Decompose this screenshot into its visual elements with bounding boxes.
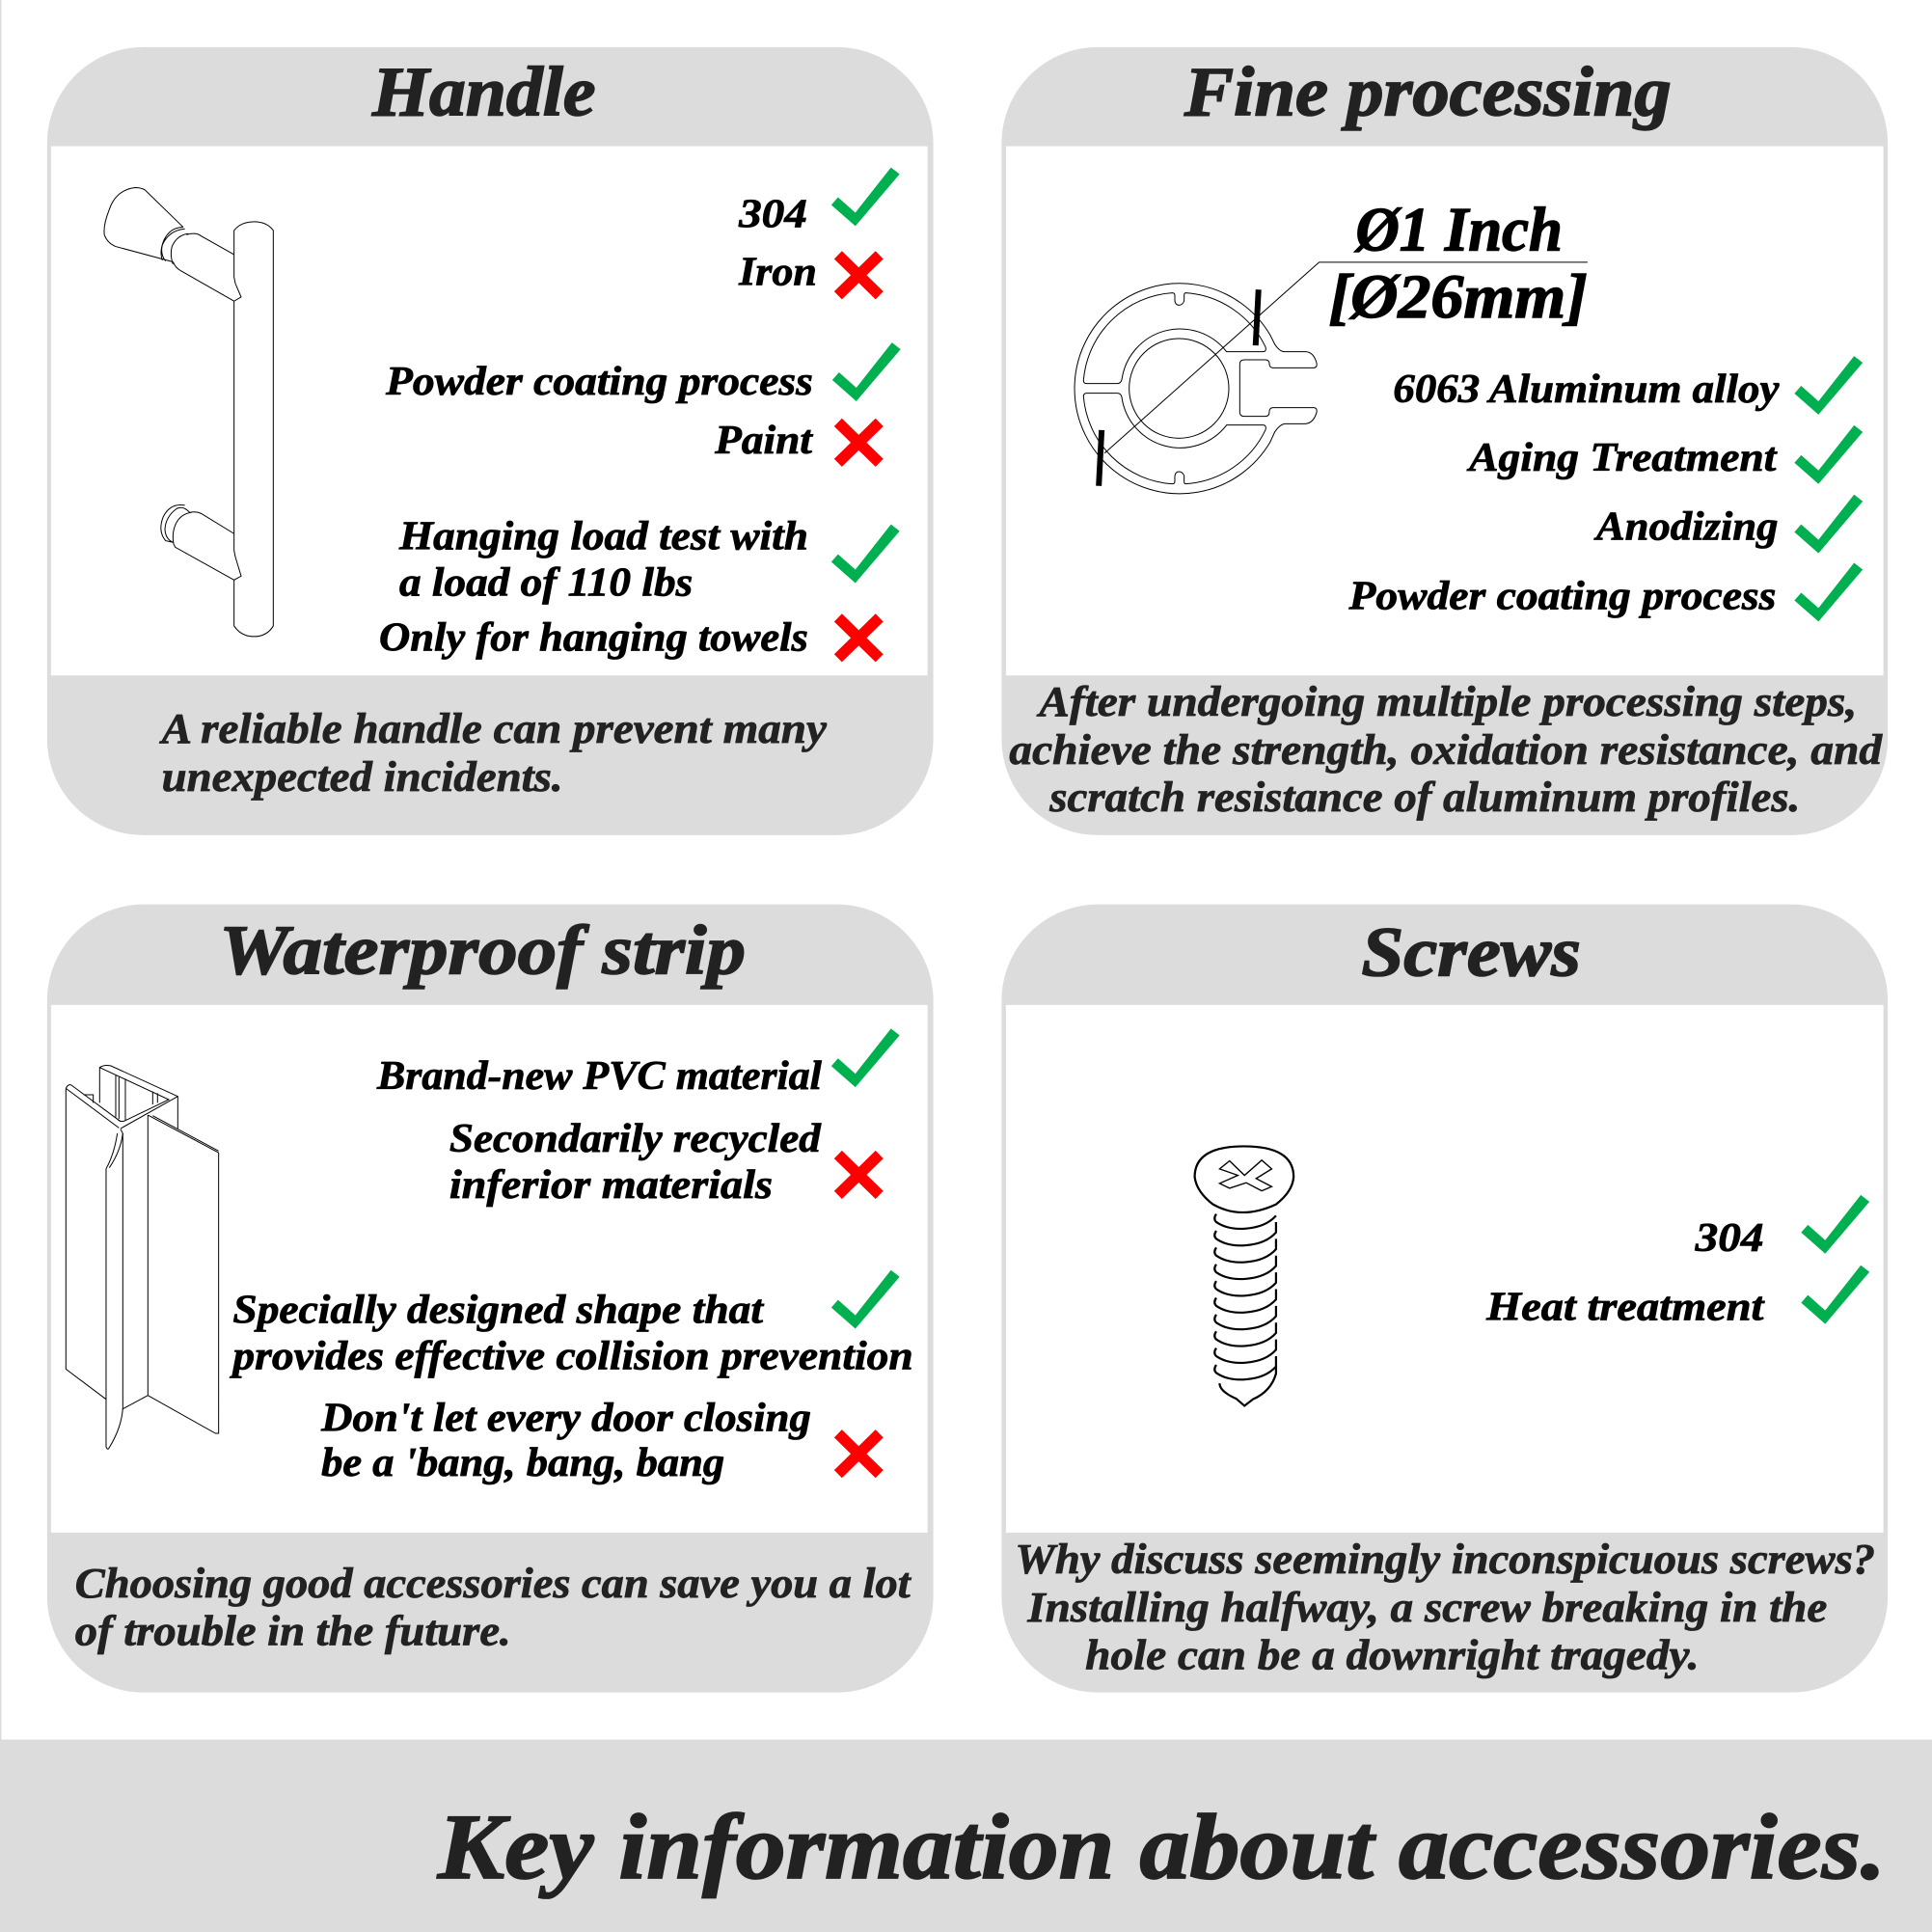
caption: screws xyxy=(1015,1535,1875,1679)
panel: handle xyxy=(47,47,934,835)
item: Powder coating process: Powder coating process xyxy=(385,359,813,404)
item: hanging load test: a load of 110 lbs xyxy=(399,559,693,605)
icon: check xyxy=(1801,1265,1869,1324)
illustration: aluminum profile cross-section xyxy=(1075,262,1588,494)
item: Iron: Iron xyxy=(738,249,817,294)
icon: check xyxy=(831,1028,900,1087)
panel background: handle xyxy=(47,47,934,835)
caption: handle xyxy=(158,704,828,801)
icon: check xyxy=(1794,356,1863,415)
item: Anodizing: Anodizing xyxy=(1593,504,1778,550)
footer band xyxy=(0,1739,1932,1932)
item: 304: 304 xyxy=(1694,1215,1763,1261)
icon: cross xyxy=(838,1155,880,1195)
caption: fine processing: After undergoing multiple processing steps, xyxy=(1036,677,1857,725)
caption: fine processing xyxy=(1009,677,1883,821)
item: door closing xyxy=(320,1395,811,1485)
item: recycled materials: inferior materials xyxy=(449,1162,773,1208)
item: Paint: Paint xyxy=(714,418,813,463)
item: hanging load test xyxy=(398,514,808,605)
illustration: door handle xyxy=(104,188,273,637)
panel background: screws xyxy=(1001,905,1888,1693)
item: door closing: Don't let every door closing xyxy=(320,1395,811,1440)
item: 304: 304 xyxy=(738,191,807,236)
illustration: waterproof strip xyxy=(66,1065,219,1449)
item: hanging load test: Hanging load test with xyxy=(398,514,808,559)
caption: handle: unexpected incidents. xyxy=(162,752,563,801)
item: Only for hanging towels: Only for hanging towels xyxy=(379,614,808,660)
title: Key information about accessories: Key information about accessories. xyxy=(437,1795,1886,1898)
caption: handle: A reliable handle can prevent many xyxy=(158,704,828,752)
dimension label: 1 inch: Ø1 Inch xyxy=(1354,195,1563,264)
icon: cross xyxy=(838,1433,880,1474)
icon: check xyxy=(1794,563,1863,621)
panel background: waterproof strip xyxy=(47,905,934,1693)
heading: Waterproof strip: Waterproof strip xyxy=(219,911,746,989)
icon: cross xyxy=(838,422,880,463)
item: recycled materials: Secondarily recycled xyxy=(449,1116,822,1161)
heading: Fine processing: Fine processing xyxy=(1184,53,1672,131)
icon: check xyxy=(1801,1195,1869,1254)
icon: check xyxy=(831,168,900,226)
dimension label: 26mm: [Ø26mm] xyxy=(1329,262,1588,332)
icon: cross xyxy=(838,255,880,295)
icon: check xyxy=(831,1270,900,1329)
panel: waterproof strip xyxy=(47,905,934,1693)
icon: check xyxy=(1794,495,1863,554)
item: 6063 Aluminum alloy: 6063 Aluminum alloy xyxy=(1393,367,1780,412)
panel background: fine processing xyxy=(1001,47,1888,835)
item: door closing: be a 'bang, bang, bang xyxy=(321,1440,724,1485)
item: Brand-new PVC material: Brand-new PVC material xyxy=(376,1053,822,1099)
panel: fine processing xyxy=(1001,47,1888,835)
caption: waterproof strip xyxy=(75,1559,912,1655)
caption: screws: Installing halfway, a screw breaking in the xyxy=(1026,1583,1827,1631)
item: specially designed shape: Specially designed shape that xyxy=(232,1288,764,1333)
item: specially designed shape: provides effective collision prevention xyxy=(229,1333,913,1378)
heading: Screws: Screws xyxy=(1361,912,1581,991)
caption: screws: hole can be a downright tragedy. xyxy=(1085,1631,1700,1679)
caption: waterproof strip: Choosing good accessories can save you a lot xyxy=(75,1559,912,1607)
illustration: screw xyxy=(1195,1146,1293,1405)
caption: fine processing: achieve the strength, oxidation resistance, and xyxy=(1009,725,1883,774)
icon: check xyxy=(831,525,900,583)
caption: waterproof strip: of trouble in the future. xyxy=(75,1607,511,1655)
item: specially designed shape xyxy=(229,1288,913,1378)
panel: screws xyxy=(1001,905,1888,1693)
icon: cross xyxy=(838,617,880,658)
caption: screws: Why discuss seemingly inconspicuous screws? xyxy=(1015,1535,1875,1583)
item: Aging Treatment: Aging Treatment xyxy=(1466,435,1778,480)
icon: check xyxy=(832,342,901,401)
caption: fine processing: scratch resistance of aluminum profiles. xyxy=(1048,773,1800,821)
item: Heat treatment: Heat treatment xyxy=(1485,1285,1765,1330)
icon: check xyxy=(1794,425,1863,484)
item: Powder coating process: Powder coating process xyxy=(1347,573,1776,618)
heading: Handle: Handle xyxy=(371,53,595,131)
item: recycled materials xyxy=(449,1116,822,1208)
